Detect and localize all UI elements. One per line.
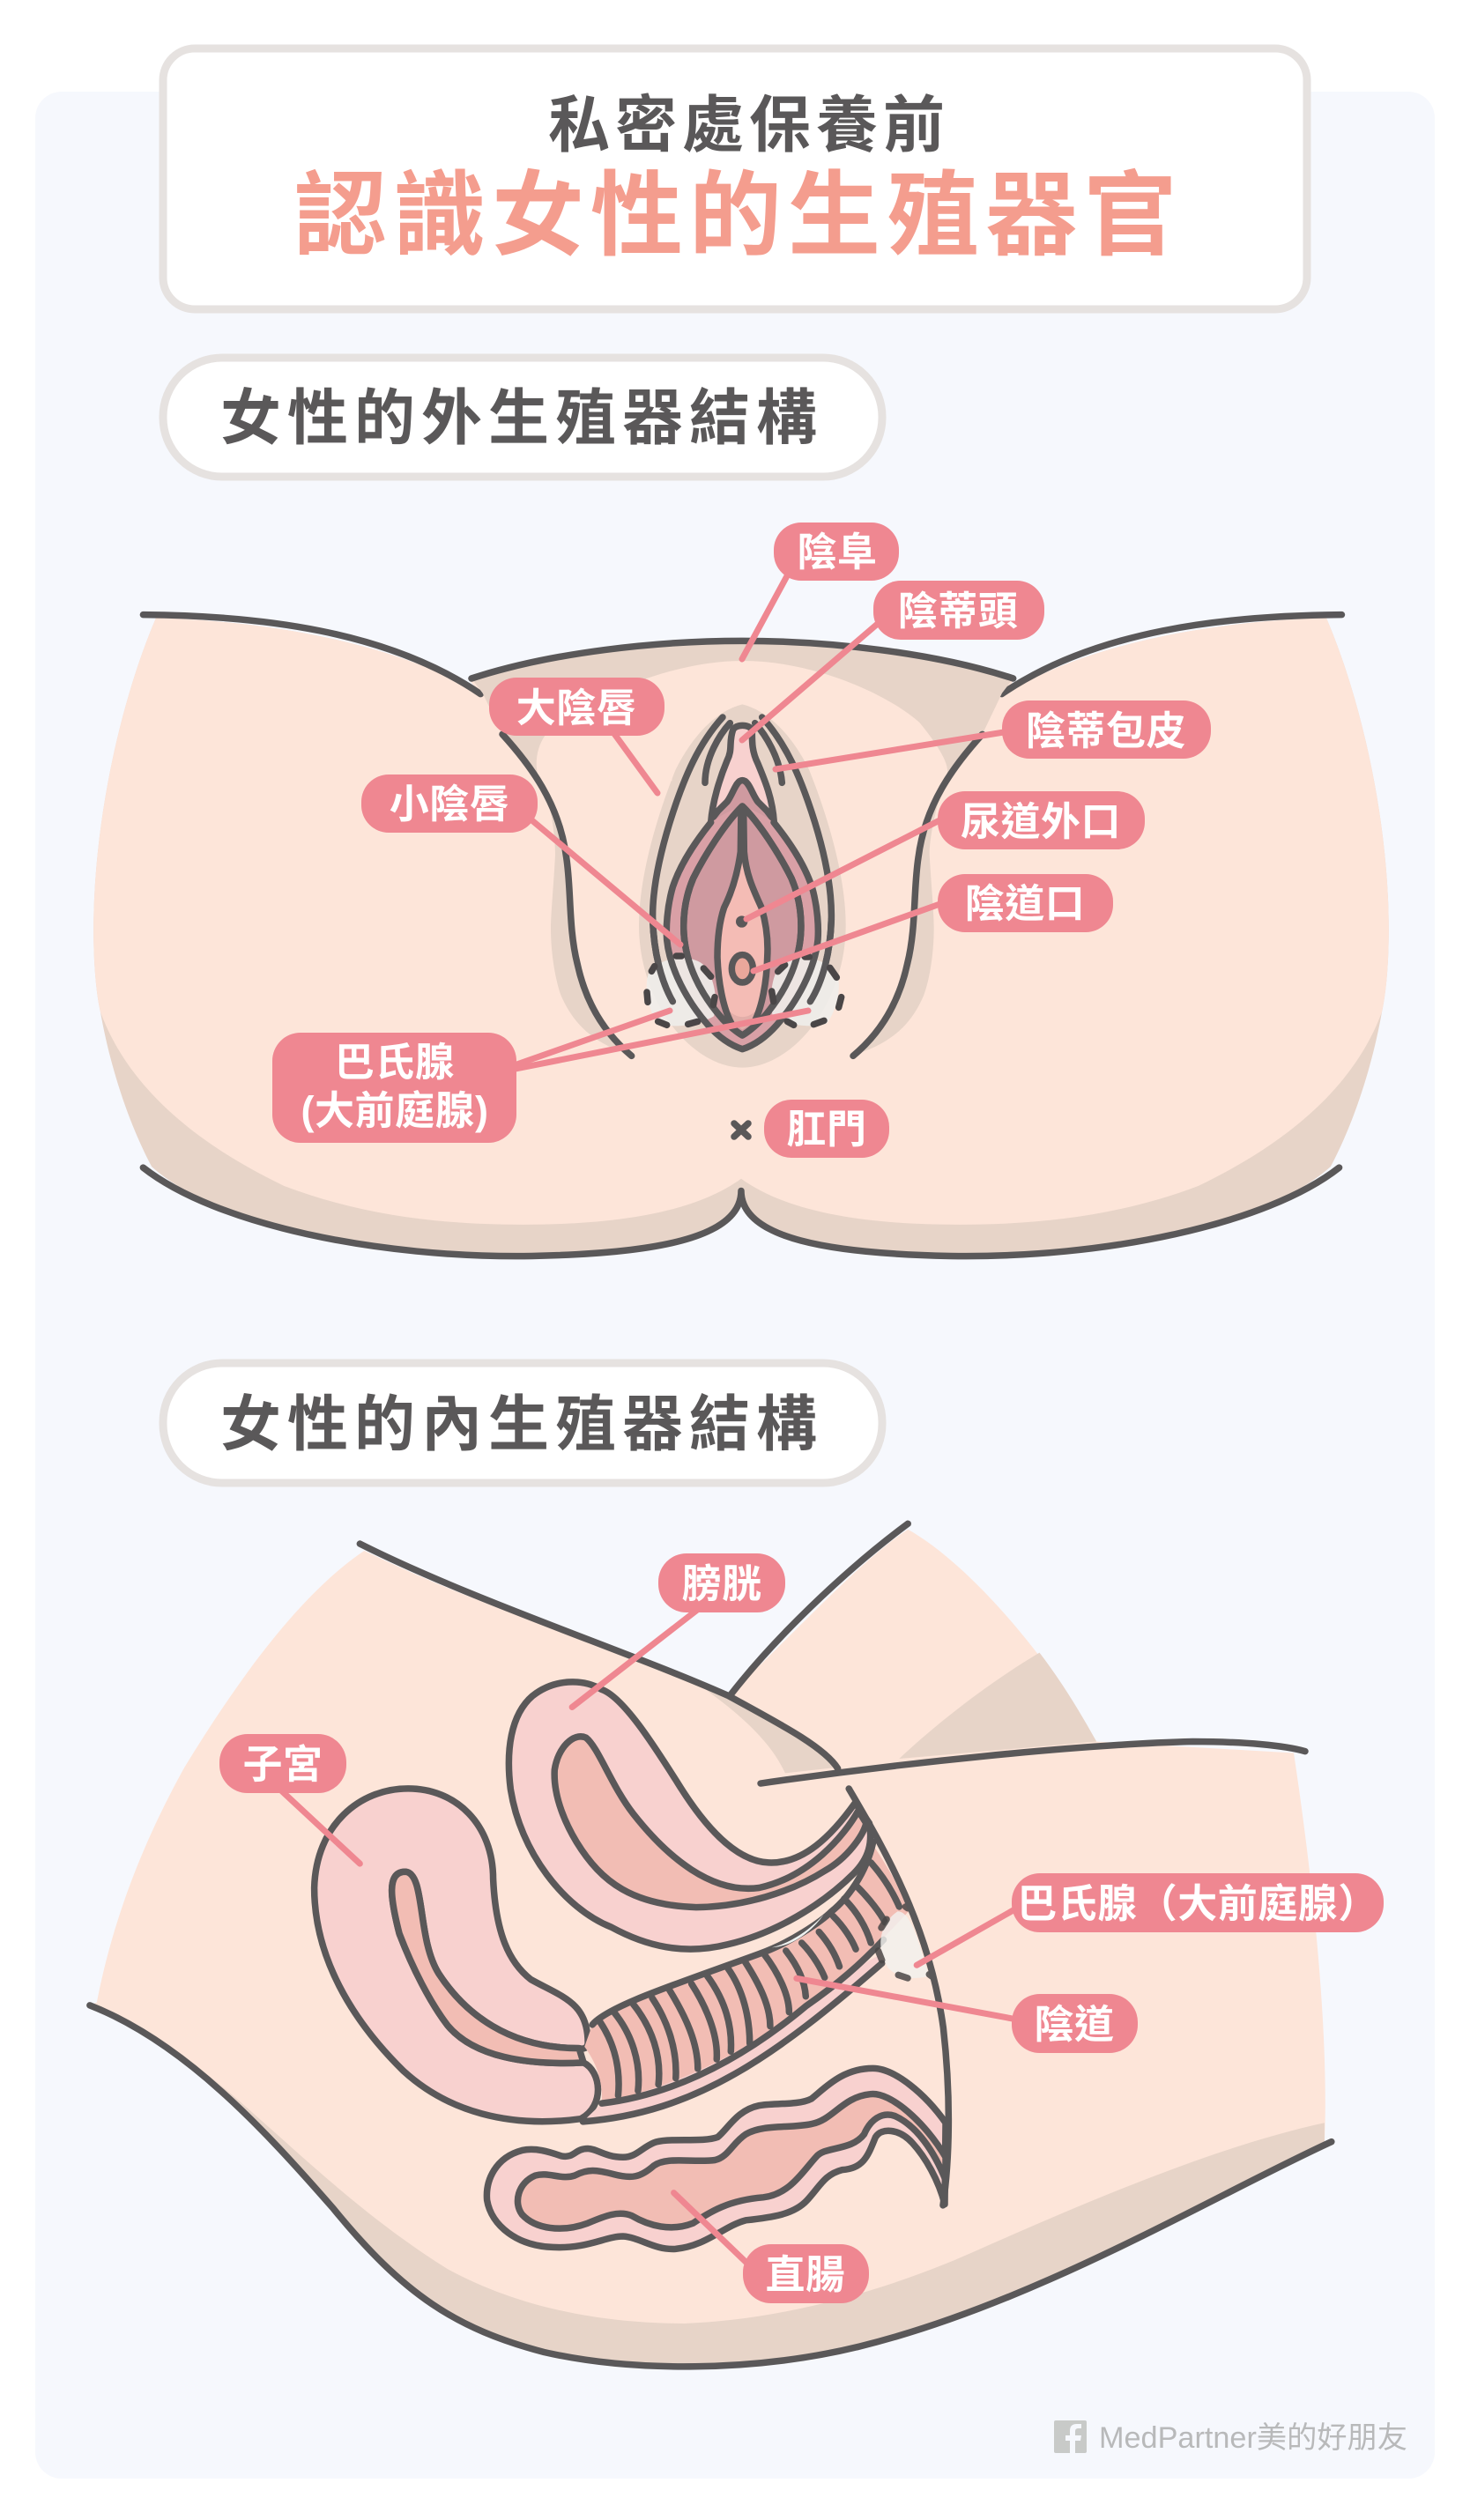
rectum: [486, 2068, 946, 2249]
bladder cavity: [554, 1737, 866, 1908]
thigh shadow: [899, 1653, 1096, 1759]
lower shadow: [211, 2077, 1325, 2367]
vestibule: [717, 857, 768, 1029]
title panel: [163, 48, 1307, 309]
label: vagina: [1012, 1994, 1138, 2053]
label: glans clitoris: 陰蒂頭: [898, 589, 1018, 634]
label: Bartholin gland two lines: [272, 1033, 516, 1143]
urethral opening: [736, 915, 747, 928]
heading: internal structure: 女性的內生殖器結構: [220, 1390, 823, 1458]
title: main line: 認識女性的生殖器官: [294, 165, 1183, 268]
label: anus: [764, 1100, 889, 1158]
heading: internal structure: [163, 1363, 882, 1483]
vulva detail: [471, 641, 1013, 1068]
label: labia majora: [489, 678, 664, 736]
uterine cavity: [392, 1871, 583, 2063]
vagina, bladder, perineal line: [509, 1682, 948, 2205]
label: bladder: 膀胱: [681, 1561, 762, 1606]
label: rectum: 直腸: [765, 2252, 846, 2297]
footer credit: MedPartner美的好朋友: [1099, 2421, 1407, 2455]
label: vaginal opening: 陰道口: [965, 881, 1085, 926]
diagram: external genitalia: [93, 615, 1389, 1256]
Bartholin glands: [647, 958, 716, 1026]
label: uterus: [219, 1734, 346, 1793]
label: clitoral hood: [1002, 700, 1211, 759]
rectal cavity: [517, 2094, 946, 2228]
heading: external structure: 女性的外生殖器結構: [220, 384, 823, 452]
label: mons pubis: 陰阜: [797, 530, 878, 574]
outer blob: [639, 704, 846, 1068]
label: Bartholin gland two lines: 巴氏腺: [335, 1040, 455, 1085]
icon: facebook: [1054, 2420, 1087, 2453]
body silhouette: [93, 615, 1389, 1256]
vaginal opening: [731, 955, 753, 982]
heading: external structure: [163, 358, 882, 477]
label: labia majora: 大陰唇: [516, 686, 636, 730]
perineal line: [849, 1789, 948, 2205]
label: labia minora: [361, 775, 538, 833]
vaginal rugae: [600, 1863, 899, 2095]
leader lines: external: [507, 573, 1009, 1071]
label: glans clitoris: [873, 581, 1044, 640]
label: mons pubis: [774, 523, 899, 581]
title: small line: 私密處保養前: [548, 91, 950, 159]
hood arch shading: [711, 781, 774, 822]
anus mark: [734, 1123, 748, 1137]
leader lines: internal: [281, 1610, 1018, 2266]
label: labia minora: 小陰唇: [390, 782, 509, 826]
labia outlines: [666, 822, 818, 1049]
body cross-section: [90, 1523, 1332, 2367]
label: vagina: 陰道: [1034, 2002, 1115, 2047]
label: rectum: [743, 2244, 869, 2303]
label: Bartholin gland one line: 巴氏腺（大前庭腺）: [1017, 1881, 1378, 1926]
label: clitoral hood: 陰蒂包皮: [1026, 708, 1186, 753]
white sliver: [772, 1915, 824, 1947]
Bartholin gland: [880, 1911, 929, 1978]
labia minora: [666, 806, 818, 1049]
label: uterus: 子宮: [242, 1742, 323, 1787]
cervix outer edge: [583, 1963, 882, 2122]
label: urethral opening: 尿道外口: [961, 799, 1121, 844]
uterus: [315, 1789, 598, 2122]
label: Bartholin gland two lines: (大前庭腺): [301, 1088, 488, 1133]
label: vaginal opening: [938, 874, 1113, 932]
diagram: internal genitalia: [90, 1523, 1332, 2367]
label: urethral opening: [938, 791, 1145, 849]
label: bladder: [658, 1553, 785, 1612]
clitoral hood: [711, 725, 774, 822]
label: anus: 肛門: [786, 1107, 867, 1152]
bladder wall: [509, 1682, 871, 1949]
